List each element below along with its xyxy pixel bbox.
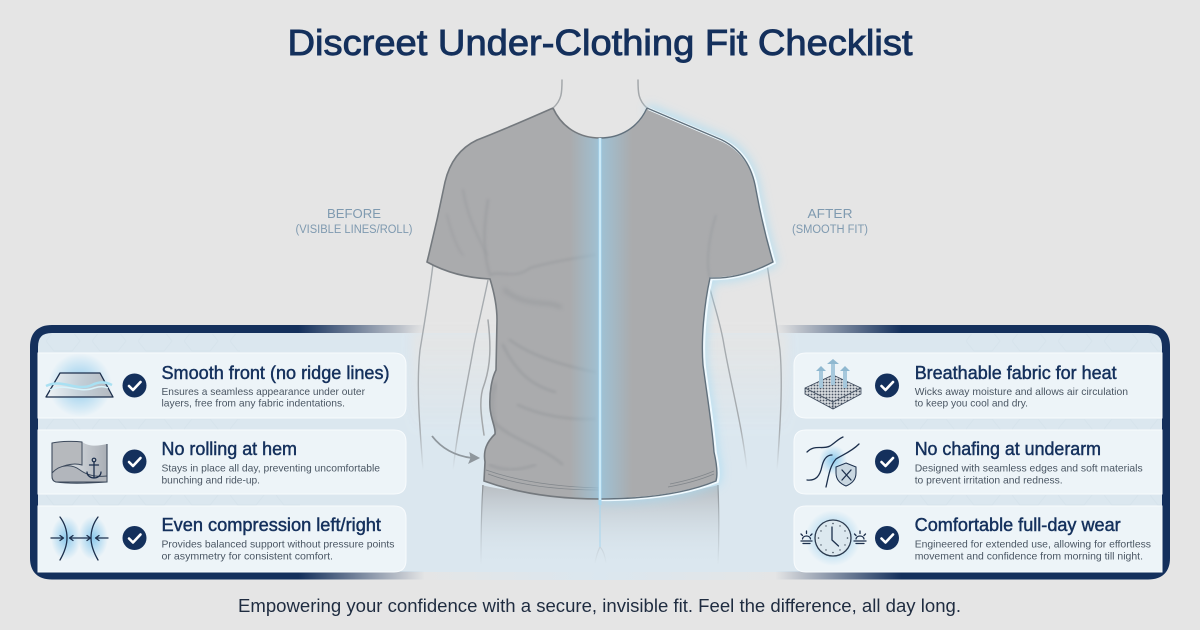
- title: Discreet Under-Clothing Fit Checklist: [288, 22, 912, 63]
- description: Engineered for extended use, allowing for effortless: [915, 538, 1151, 550]
- footer tagline: Empowering your confidence with a secure, invisible fit. Feel the difference, all day long.: [238, 596, 961, 616]
- description: [915, 462, 1143, 486]
- description: to keep you cool and dry.: [915, 398, 1028, 410]
- description: movement and confidence from morning till night.: [915, 550, 1143, 562]
- figure: torso and t-shirt comparison: [418, 80, 781, 565]
- panel: checklist frame: [34, 329, 1166, 580]
- label: before: (VISIBLE LINES/ROLL): [296, 224, 413, 236]
- icon: check: [875, 526, 899, 550]
- item: no chafing: [794, 430, 1162, 494]
- icon: arrow to hem roll: [432, 436, 479, 463]
- neck outline: [553, 80, 647, 108]
- icon: hem and anchor: [52, 441, 107, 483]
- waist line behind shirt: [481, 320, 490, 435]
- label: before: BEFORE: [327, 206, 381, 221]
- label: after: AFTER: [808, 206, 852, 221]
- panel: right checklist: [794, 353, 1162, 572]
- description: Stays in place all day, preventing uncomfortable: [162, 462, 380, 474]
- icon: check: [122, 450, 146, 474]
- heading: No rolling at hem: [162, 439, 297, 459]
- t-shirt: [427, 108, 773, 499]
- description: [915, 386, 1128, 410]
- icon: compression arrows: [51, 516, 108, 560]
- left arm: [418, 264, 488, 470]
- description: [162, 462, 380, 486]
- heading: Breathable fabric for heat: [915, 363, 1117, 383]
- description: Designed with seamless edges and soft materials: [915, 462, 1143, 474]
- item: no rolling: [38, 430, 406, 494]
- description: Wicks away moisture and allows air circulation: [915, 386, 1128, 398]
- label: after: (SMOOTH FIT): [792, 224, 868, 236]
- item: breathable: [794, 353, 1162, 418]
- shirt left outline: [427, 108, 600, 499]
- icon: clock with sun: [801, 510, 866, 566]
- item: even compression: [38, 506, 406, 572]
- label: before: [296, 206, 413, 236]
- right side glow: [600, 108, 773, 499]
- panel: left checklist: [38, 353, 406, 572]
- center highlight: [574, 133, 626, 498]
- icon: check: [875, 450, 899, 474]
- icon: check: [875, 374, 899, 398]
- pants: [482, 485, 718, 565]
- description: Ensures a seamless appearance under outer: [162, 386, 365, 398]
- heading: Smooth front (no ridge lines): [162, 363, 390, 383]
- description: Provides balanced support without pressure points: [162, 538, 394, 550]
- description: layers, free from any fabric indentations.: [162, 398, 345, 410]
- item: smooth front: [38, 353, 406, 418]
- heading: No chafing at underarm: [915, 439, 1101, 459]
- description: bunching and ride-up.: [162, 474, 260, 486]
- description: to prevent irritation and redness.: [915, 474, 1063, 486]
- icon: breathable mesh: [805, 359, 861, 409]
- description: or asymmetry for consistent comfort.: [162, 550, 333, 562]
- right arm: [708, 264, 781, 470]
- icon: underarm shield: [807, 437, 859, 487]
- description: [162, 538, 394, 562]
- icon: check: [122, 374, 146, 398]
- icon: check: [122, 526, 146, 550]
- icon: smooth fabric: [46, 353, 113, 417]
- shirt wrinkles: [484, 133, 714, 498]
- item: comfortable: [794, 506, 1162, 572]
- description: [915, 538, 1151, 562]
- label: after: [792, 206, 868, 236]
- center divider line: [598, 138, 602, 547]
- heading: Comfortable full-day wear: [915, 515, 1121, 535]
- description: [162, 386, 365, 410]
- shirt right outline: [600, 108, 774, 500]
- heading: Even compression left/right: [162, 515, 381, 535]
